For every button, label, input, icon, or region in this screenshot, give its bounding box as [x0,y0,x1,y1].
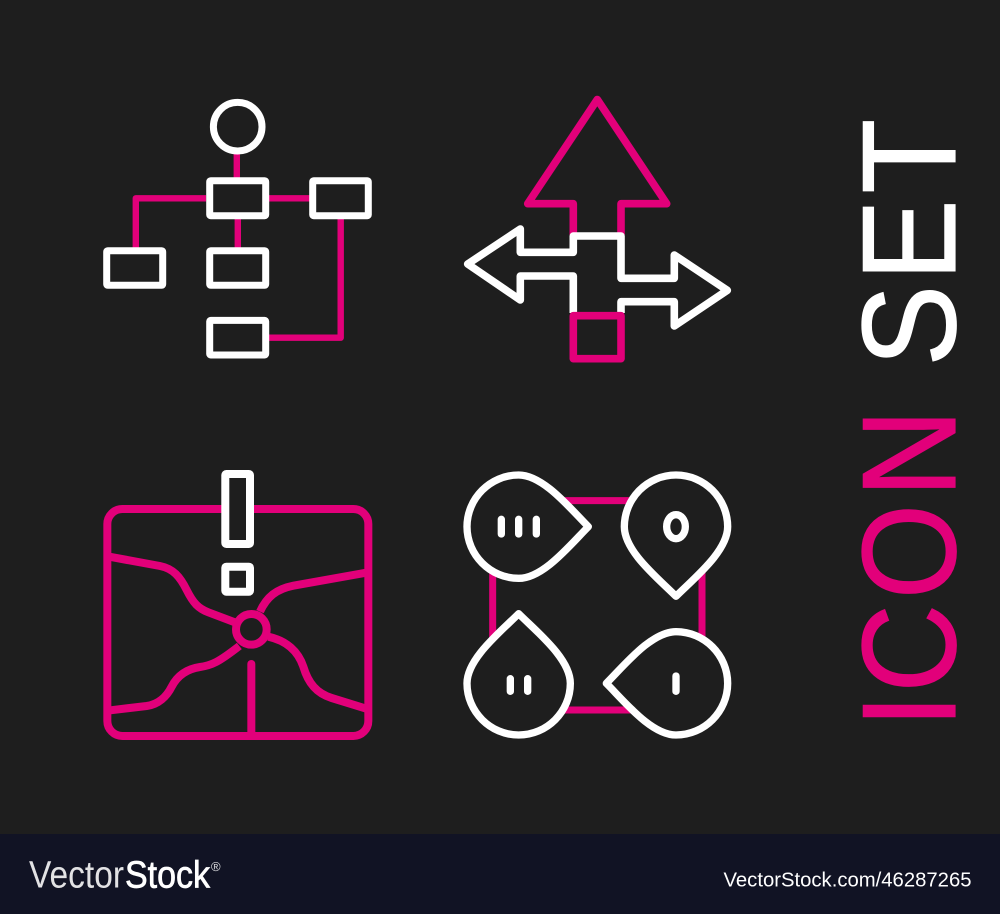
watermark logo [29,854,221,896]
connecting square [493,501,702,710]
up arrow [528,100,667,235]
exclamation mark [225,474,250,592]
left and right arrows [468,229,727,326]
icon: four numbered location pins [467,475,728,735]
title: ICON SET: SET [835,119,984,367]
icon: road map with warning [107,474,368,736]
map outline and roads [107,509,368,736]
pin two [467,614,570,735]
pin one [606,632,728,735]
icon: directional arrows [468,100,727,359]
footer bar [0,834,1000,914]
watermark logo: ® [211,859,221,874]
watermark logo: Vector [29,854,124,896]
pin zero [624,475,728,596]
title: ICON SET [835,119,984,728]
origin square [573,316,621,359]
pin three [467,475,588,578]
icon: flowchart [107,102,368,355]
watermark logo: Stock [125,854,211,896]
watermark image id: VectorStock.com/46287265 [724,868,972,892]
flowchart nodes [107,102,368,355]
flowchart connectors [136,152,341,338]
title: ICON SET: ICON [835,409,984,728]
